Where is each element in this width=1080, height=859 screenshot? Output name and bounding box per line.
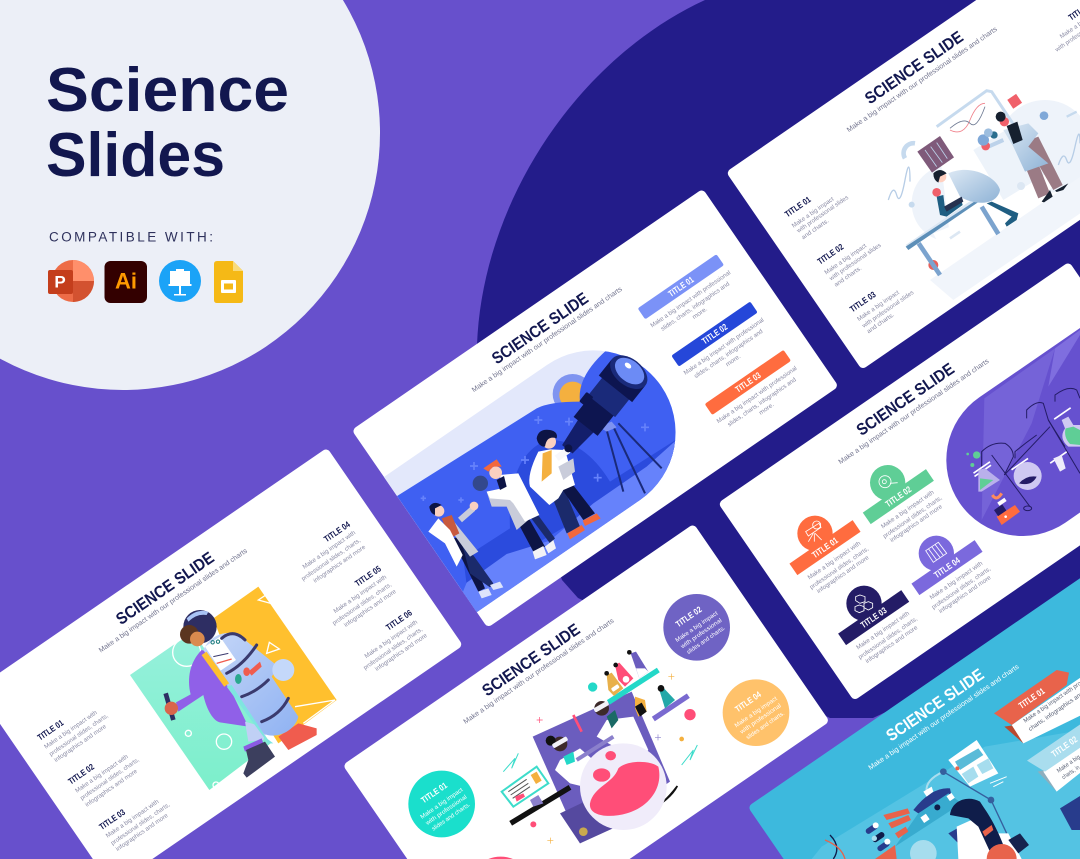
subtitle: Make a big impact with our professional slides and charts bbox=[471, 286, 624, 394]
text block: title 03: and charts. bbox=[866, 311, 896, 335]
text block: title 04 bbox=[300, 519, 367, 584]
heading: SCIENCE SLIDE bbox=[883, 665, 987, 745]
text block: title 04: Make a big impact with bbox=[301, 529, 357, 571]
text block: title 02: Make a big impact with bbox=[74, 753, 130, 795]
text block: title 02: TITLE 02 bbox=[816, 242, 845, 266]
tile: title 04: TITLE 04 bbox=[932, 555, 962, 580]
text block: title 03: with professional slides bbox=[860, 289, 915, 330]
tag: title 02 bbox=[671, 302, 758, 367]
circle: pink partially visible bbox=[467, 857, 534, 859]
text block: title 01: with professional slides bbox=[795, 194, 850, 235]
subtitle: Make a big impact with our professional slides and charts bbox=[463, 617, 616, 726]
tile: title 04: Make a big impact with bbox=[929, 560, 985, 601]
text block: title 01: professional slides, charts, bbox=[48, 712, 110, 758]
icon: shelf bottles bbox=[604, 650, 675, 708]
illustration: lab workers bbox=[888, 91, 1080, 300]
text block: title 06: professional slides, charts, bbox=[362, 626, 424, 672]
heading: SCIENCE SLIDE bbox=[479, 620, 583, 700]
ribbon: title 03 bbox=[1060, 795, 1080, 830]
text block: title 06: infographics and more bbox=[374, 632, 429, 673]
circle: title 01 bbox=[408, 771, 475, 837]
text block: title 03: Make a big impact with bbox=[105, 798, 161, 840]
tile: title 01 bbox=[789, 516, 871, 595]
heading: SCIENCE SLIDE bbox=[861, 27, 967, 108]
illustration: telescope scene bbox=[384, 350, 676, 612]
icon: tripod bbox=[607, 423, 662, 493]
icon: Illustrator: Ai bbox=[115, 268, 137, 294]
text block: title 02 bbox=[66, 753, 141, 809]
circle: title 04: TITLE 04 bbox=[733, 689, 763, 714]
main title bbox=[46, 56, 289, 190]
tile: title 02: professional slides, charts, bbox=[882, 494, 944, 540]
text block: title 01 description: slides, charts, infographics and bbox=[660, 280, 731, 333]
text block: title 02: Make a big impact bbox=[823, 242, 868, 276]
text block: title 01 bbox=[783, 194, 850, 241]
circle: title 02: slides and charts. bbox=[686, 625, 727, 656]
tag: title 03 bbox=[705, 350, 791, 415]
text block: title 01: TITLE 01 bbox=[36, 718, 65, 742]
ribbon: title 01 bbox=[994, 670, 1080, 743]
circle: title 01: with professional bbox=[424, 795, 468, 827]
icon: PowerPoint: P bbox=[54, 272, 66, 292]
text block: title 05: Make a big impact with bbox=[332, 573, 388, 615]
text block: title 02: TITLE 02 bbox=[66, 762, 96, 786]
figure: scientist with orange hair bbox=[473, 459, 556, 559]
subtitle: Make a big impact with our professional slides and charts bbox=[868, 663, 1021, 772]
text block: title 03: infographics and more bbox=[115, 812, 170, 853]
panel: lab workers slide bbox=[726, 0, 1080, 370]
icon: Illustrator bbox=[104, 261, 147, 303]
tile: title 03 bbox=[838, 586, 920, 665]
tile: title 04: infographics and more bbox=[938, 574, 993, 615]
text block: title 03 bbox=[97, 798, 172, 853]
icon: Keynote bbox=[159, 260, 201, 302]
heading: SCIENCE SLIDE bbox=[488, 289, 592, 368]
circle: title 02 bbox=[663, 594, 730, 661]
text block: title 06: Make a big impact with bbox=[363, 618, 419, 660]
icon: Google Slides bbox=[214, 261, 243, 303]
text block: title 04: professional slides, charts, bbox=[300, 537, 362, 583]
tile: title 02: TITLE 02 bbox=[883, 484, 913, 509]
text block: title 03 description: more. bbox=[758, 401, 776, 417]
text block: title 02: and charts. bbox=[833, 265, 863, 289]
text block: title 03: Make a big impact bbox=[856, 289, 901, 323]
illustration: astronaut bbox=[130, 587, 337, 790]
text block: title 06 bbox=[362, 607, 429, 673]
tile: title 03: TITLE 03 bbox=[859, 605, 889, 630]
text block: title 01 bbox=[36, 709, 110, 764]
panel: flask circles slide bbox=[343, 524, 830, 859]
text block: title 02 description: more. bbox=[724, 353, 742, 368]
panel: flask chemistry slide bbox=[718, 262, 1080, 701]
subtitle: Make a big impact with our professional slides and charts bbox=[838, 358, 991, 466]
text block: title 05: professional slides, charts, bbox=[331, 581, 393, 627]
text block: title 01 description: Make a big impact with professional bbox=[649, 269, 732, 329]
circle: title 02: Make a big impact bbox=[675, 611, 720, 644]
text block: title 02 description: slides, charts, infographics and bbox=[693, 328, 765, 380]
circle: title 01: Make a big impact bbox=[420, 787, 465, 821]
circle: title 04 bbox=[723, 679, 789, 746]
text block: title 03 description: slides, charts, infographics and bbox=[726, 376, 798, 428]
figure: scientist on left bbox=[428, 502, 503, 598]
text block: title 04: infographics and more bbox=[312, 543, 367, 584]
tile: title 02: Make a big impact with bbox=[880, 489, 936, 530]
text block: title 01: Make a big impact bbox=[791, 196, 836, 230]
main title: Slides bbox=[46, 121, 225, 190]
circle: title 04: slides and charts. bbox=[745, 711, 786, 741]
tag: title 01 bbox=[638, 254, 724, 319]
text block: title 02: infographics and more bbox=[84, 768, 139, 809]
text block: title 05: infographics and more bbox=[343, 588, 398, 629]
illustration: big flask and scientists bbox=[502, 650, 697, 844]
text block: title 01: TITLE 01 bbox=[783, 194, 813, 219]
ribbon: title 02 bbox=[1027, 723, 1080, 792]
circle: title 02: TITLE 02 bbox=[674, 604, 704, 629]
text block: title 03: TITLE 03 bbox=[848, 289, 878, 314]
tile: title 02: infographics and more bbox=[889, 503, 944, 544]
text block: title 01: Make a big impact with bbox=[43, 709, 99, 751]
tile: title 01: TITLE 01 bbox=[810, 535, 840, 560]
compatible with label: COMPATIBLE WITH: bbox=[49, 230, 213, 244]
text block: title 03: TITLE 03 bbox=[97, 807, 127, 832]
tag: title 01: TITLE 01 bbox=[666, 274, 696, 299]
text block: title 02: with professional slides bbox=[828, 242, 883, 283]
ribbon: title 01: TITLE 01 bbox=[1017, 686, 1047, 711]
text block: title 05 bbox=[331, 563, 398, 629]
text block: title 03 bbox=[848, 289, 915, 335]
text block: title 02 bbox=[816, 242, 883, 289]
tile: title 03: professional slides, charts, bbox=[857, 615, 919, 661]
dark arch shape bbox=[477, 0, 1080, 718]
figure: scientist at telescope bbox=[529, 430, 601, 539]
illustration: lab dashboard and scientist bbox=[825, 740, 1029, 859]
circle: title 02: with professional bbox=[679, 618, 723, 651]
tag: title 03: TITLE 03 bbox=[733, 370, 763, 395]
tile: title 03: Make a big impact with bbox=[855, 610, 911, 651]
panel: telescope slide bbox=[350, 189, 839, 640]
text block: title 03 description: Make a big impact with professional bbox=[716, 365, 798, 425]
main title: Science bbox=[46, 56, 289, 125]
text block: title 01: and charts. bbox=[800, 217, 831, 241]
tile: title 04 bbox=[911, 536, 993, 615]
illustration: chemistry apparatus bbox=[966, 327, 1080, 525]
panel: astronaut slide bbox=[0, 448, 463, 859]
circle: title 04: with professional bbox=[738, 703, 783, 736]
text block: title 01: infographics and more bbox=[53, 723, 108, 764]
heading: SCIENCE SLIDE bbox=[112, 548, 218, 629]
text block: title 05: TITLE 05 bbox=[353, 563, 383, 588]
tile: title 01: infographics and more bbox=[816, 554, 871, 595]
text block: title 03: professional slides, charts, bbox=[110, 801, 172, 847]
text block: title 01 description: more. bbox=[691, 306, 709, 321]
subtitle: Make a big impact with our professional slides and charts bbox=[846, 26, 999, 134]
text block: title 02 description: Make a big impact with professional bbox=[683, 317, 765, 377]
text block: title 06: TITLE 06 bbox=[384, 607, 414, 632]
icon: PowerPoint bbox=[48, 260, 94, 302]
tile: title 01: professional slides, charts, bbox=[809, 545, 870, 591]
panel: blue slide bbox=[748, 565, 1080, 859]
icon: telescope bbox=[551, 348, 654, 463]
tile: title 04: professional slides, charts, bbox=[931, 565, 992, 611]
text block: title 04: TITLE 04 bbox=[322, 519, 352, 544]
tile: title 03: infographics and more bbox=[864, 624, 920, 665]
tag: title 02: TITLE 02 bbox=[700, 322, 729, 346]
tile: title 02 bbox=[863, 465, 944, 544]
circle: title 01: TITLE 01 bbox=[419, 780, 449, 805]
circle: title 01: slides and charts. bbox=[431, 802, 472, 833]
tile: title 01: Make a big impact with bbox=[807, 540, 863, 581]
text block: title 02: professional slides, charts, bbox=[79, 756, 141, 802]
subtitle: Make a big impact with our professional slides and charts bbox=[98, 547, 249, 654]
circle: title 04: Make a big impact bbox=[734, 696, 779, 729]
heading: SCIENCE SLIDE bbox=[853, 359, 958, 440]
header circle panel bbox=[0, 0, 380, 390]
